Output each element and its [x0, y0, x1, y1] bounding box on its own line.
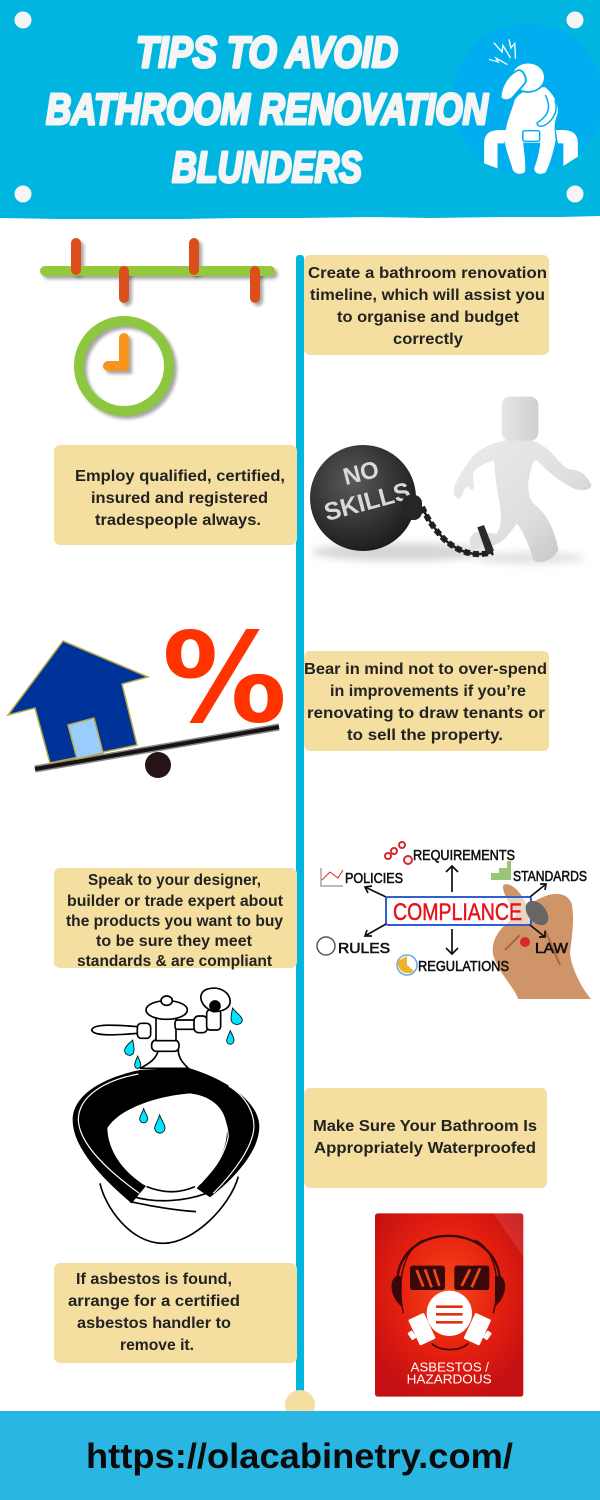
tip 5 box: Make Sure Your Bathroom Is	[313, 1118, 537, 1135]
icon: stressed person on toilet	[452, 23, 600, 175]
header banner	[0, 0, 600, 219]
image: asbestos hazard sign	[375, 1213, 523, 1397]
house	[8, 641, 148, 763]
tip 6 box: arrange for a certified	[68, 1293, 240, 1310]
tip 4 box: to be sure they meet	[96, 933, 253, 950]
percent sign: %	[162, 607, 287, 751]
tip 1 box: Create a bathroom renovation	[308, 265, 547, 282]
tip 1 box: correctly	[393, 331, 463, 348]
small chart icons	[317, 842, 530, 975]
tip 5 box: Appropriately Waterproofed	[314, 1140, 536, 1157]
icon: house and percent on a scale	[8, 607, 287, 778]
tip 4 box	[54, 868, 297, 970]
title: BLUNDERS	[172, 143, 362, 192]
title: TIPS TO AVOID	[136, 28, 398, 77]
tip 3 box: to sell the property.	[347, 727, 503, 744]
running figure	[454, 397, 592, 562]
hand	[493, 884, 591, 999]
tip 4 box: the products you want to buy	[66, 913, 283, 930]
sign label: HAZARDOUS	[407, 1371, 492, 1386]
flush valve	[92, 988, 230, 1068]
tip 3 box: Bear in mind not to over-spend	[304, 661, 547, 678]
image: no skills ball and chain: NO	[340, 456, 382, 491]
tip 2 box	[54, 445, 297, 545]
image: compliance diagram	[317, 842, 591, 999]
tip 2 box: Employ qualified, certified,	[75, 468, 285, 485]
footer url: https://olacabinetry.com/	[86, 1437, 513, 1476]
image: compliance diagram: REGULATIONS	[418, 958, 509, 975]
image: compliance diagram: RULES	[338, 940, 390, 957]
tip 4 box: Speak to your designer,	[88, 872, 261, 889]
tip 4 box: standards & are compliant	[77, 953, 273, 970]
tip 6 box	[54, 1263, 297, 1363]
tip 1 box: to organise and budget	[337, 309, 520, 326]
tip 4 box: builder or trade expert about	[67, 893, 284, 910]
image: compliance diagram: POLICIES	[345, 870, 403, 887]
tip 2 box: tradespeople always.	[95, 512, 261, 529]
corner dots	[14, 12, 584, 202]
arrows	[365, 866, 546, 954]
tip 6 box: asbestos handler to	[77, 1315, 231, 1332]
icon: leaking toilet	[73, 988, 259, 1243]
labels: REQUIREMENTS	[413, 847, 515, 864]
tip 5 box	[304, 1088, 547, 1188]
tip 3 box: in improvements if you’re	[330, 683, 526, 700]
icon: timeline and clock	[45, 243, 273, 414]
seat	[73, 1067, 259, 1203]
image: no skills ball and chain: SKILLS	[321, 477, 413, 527]
title: BATHROOM RENOVATION	[46, 85, 489, 134]
water drops	[125, 1008, 242, 1133]
sign label	[407, 1360, 492, 1386]
tip 1 box: timeline, which will assist you	[310, 287, 545, 304]
sign label: ASBESTOS /	[411, 1360, 489, 1375]
respirator wearer	[391, 1236, 505, 1350]
title	[46, 28, 489, 192]
tip 6 box: If asbestos is found,	[76, 1271, 232, 1288]
tip 6 box: remove it.	[120, 1337, 194, 1354]
chain	[402, 495, 493, 554]
tip 3 box: renovating to draw tenants or	[307, 705, 545, 722]
image: compliance diagram: LAW	[535, 940, 569, 957]
central timeline	[285, 255, 315, 1420]
tip 3 box	[304, 651, 549, 751]
tip 2 box: insured and registered	[91, 490, 268, 507]
image: compliance diagram: COMPLIANCE	[393, 899, 522, 926]
image: no skills ball and chain	[310, 397, 592, 564]
tip 1 box	[304, 255, 549, 355]
footer band	[0, 1411, 600, 1500]
